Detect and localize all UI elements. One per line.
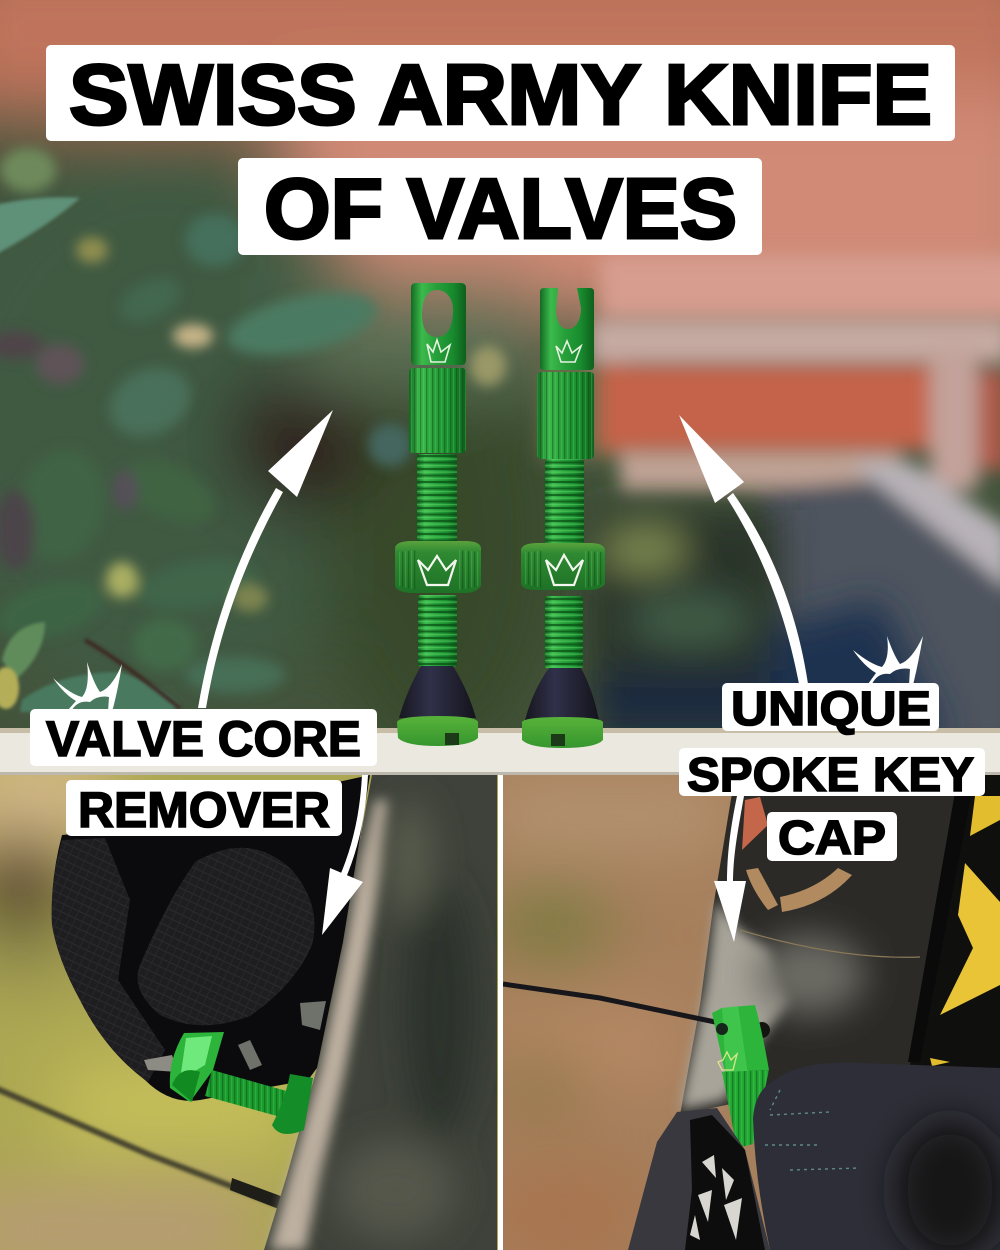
icon: green valve, cap removing core (144, 1032, 313, 1134)
label: unique: UNIQUE (731, 683, 931, 736)
yellow graphic (905, 775, 1000, 1075)
spoke (503, 984, 720, 1023)
label: remover: REMOVER (78, 782, 330, 838)
icon: gloved hand (628, 1063, 1000, 1250)
icon: right valve (521, 288, 605, 748)
arrow: pointing down to remover in use (322, 775, 368, 935)
icon: left valve (395, 283, 481, 746)
ledge (0, 728, 1000, 775)
label: cap: CAP (778, 812, 886, 865)
icon: green spoke key cap (712, 1005, 770, 1148)
spoke (0, 1088, 280, 1205)
icon: crown outline left (53, 662, 122, 712)
arrow: pointing down to spoke key in use (714, 796, 746, 942)
panel: right photo, spoke key cap in use (490, 775, 1000, 1250)
rim (680, 796, 954, 1112)
title line 1: SWISS ARMY KNIFE (69, 48, 932, 143)
label: valve core: VALVE CORE (46, 711, 361, 767)
arrow: pointing up to valve core remover (198, 410, 333, 708)
valve cap with hole (411, 283, 466, 365)
sharp leaf left (0, 197, 80, 255)
icon: black glove (52, 775, 370, 1101)
valve cap with slot (540, 288, 594, 370)
arrow: pointing up to spoke key cap (679, 415, 808, 684)
panel: left photo, valve core remover in use (0, 750, 498, 1250)
divider between bottom photos (498, 775, 503, 1250)
label: spoke key: SPOKE KEY (687, 749, 974, 802)
tyre (264, 775, 497, 1250)
icon: crown outline right (853, 636, 923, 685)
panel: top photo background (0, 0, 1000, 760)
title line 2: OF VALVES (264, 162, 737, 257)
